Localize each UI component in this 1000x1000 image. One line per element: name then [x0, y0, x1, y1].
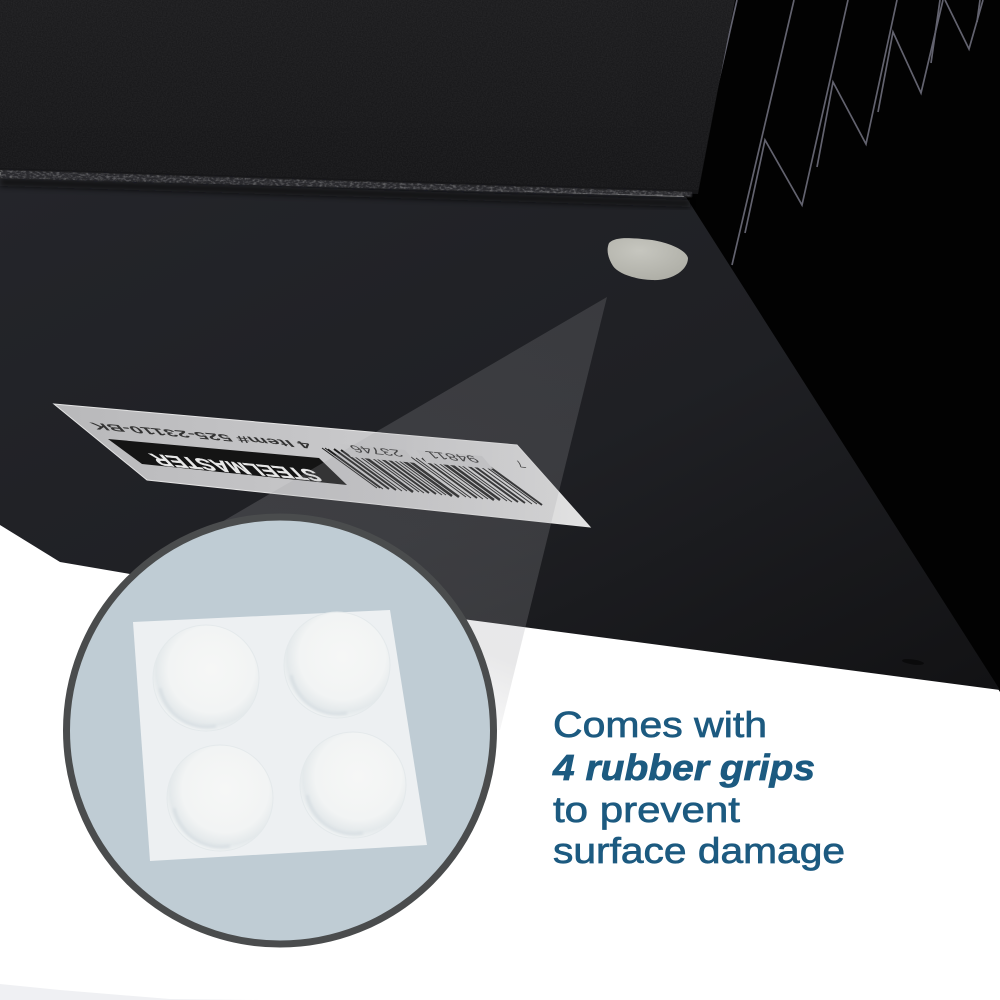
shadow under fold	[0, 178, 690, 207]
caption text: surface damage	[553, 830, 845, 871]
caption text: 4 rubber grips	[552, 747, 815, 788]
spotlight beam	[208, 297, 607, 730]
foot dimple	[902, 658, 924, 666]
bottom grey sliver	[0, 984, 260, 1000]
magnified circle	[66, 517, 494, 944]
logo text: STEELMASTER	[144, 450, 328, 485]
grip top right	[284, 612, 390, 718]
item number: 4 Item# 525-23110-BK	[86, 420, 316, 451]
wire divider lines	[700, 0, 983, 265]
digit patch left	[340, 444, 416, 463]
label logo bar	[108, 439, 347, 485]
digit patch middle	[416, 450, 493, 469]
grip bottom right	[300, 732, 406, 838]
barcode digits middle: 94811	[422, 449, 483, 465]
barcode digits left: 23746	[346, 443, 407, 459]
caption text	[552, 704, 845, 871]
lower face of the sorter	[0, 175, 1000, 690]
caption text: Comes with	[553, 704, 767, 745]
caption text: to prevent	[553, 789, 740, 830]
rubber grip on sorter	[608, 238, 688, 280]
backing sheet	[133, 610, 427, 861]
upper face of the sorter	[0, 0, 740, 198]
product label	[54, 404, 590, 527]
black interior of the sorter	[680, 0, 1000, 692]
grip bottom left	[167, 745, 273, 851]
grip top left	[153, 625, 259, 731]
barcode	[322, 448, 542, 505]
barcode digit 7: 7	[511, 458, 529, 470]
folded edge highlight	[0, 170, 692, 198]
